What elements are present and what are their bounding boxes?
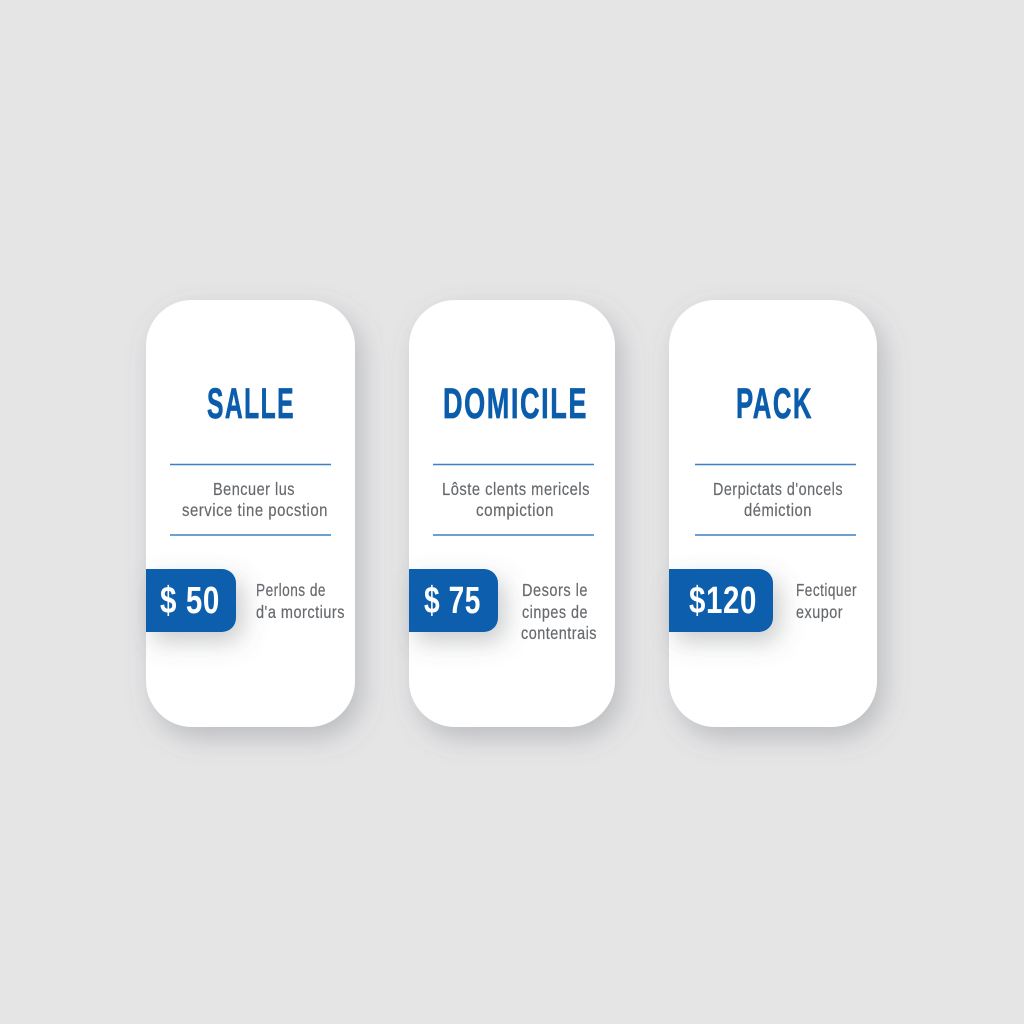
heading: SALLE: SALLE bbox=[207, 380, 295, 428]
description: Bencuer lus bbox=[213, 479, 295, 499]
heading: PACK: PACK bbox=[736, 380, 813, 428]
side note: Desors le bbox=[522, 580, 588, 600]
side note: exupor bbox=[796, 602, 843, 622]
description bbox=[713, 479, 843, 520]
description: Lôste clents mericels bbox=[442, 479, 590, 499]
description: démiction bbox=[744, 500, 812, 520]
heading: DOMICILE: DOMICILE bbox=[443, 380, 588, 428]
description: service tine pocstion bbox=[182, 500, 328, 520]
side note bbox=[521, 580, 597, 643]
side note: Fectiquer bbox=[796, 580, 857, 600]
price badge: $120: $120 bbox=[689, 580, 757, 622]
side note bbox=[256, 580, 345, 622]
side note: contentrais bbox=[521, 623, 597, 643]
side note: cinpes de bbox=[522, 602, 588, 622]
price badge: $120 bbox=[669, 569, 773, 632]
panel: DOMICILE bbox=[409, 300, 615, 727]
price badge: $ 50: $ 50 bbox=[160, 580, 220, 622]
panel: SALLE bbox=[146, 300, 355, 727]
description: compiction bbox=[476, 500, 554, 520]
card background bbox=[146, 300, 355, 727]
side note bbox=[796, 580, 857, 622]
price badge: $ 75 bbox=[409, 569, 498, 632]
description bbox=[182, 479, 328, 520]
price badge: $ 75: $ 75 bbox=[424, 580, 481, 622]
side note: Perlons de bbox=[256, 580, 326, 600]
card background bbox=[409, 300, 615, 727]
price badge: $ 50 bbox=[146, 569, 236, 632]
card background bbox=[669, 300, 877, 727]
description: Derpictats d'oncels bbox=[713, 479, 843, 499]
side note: d'a morctiurs bbox=[256, 602, 345, 622]
description bbox=[442, 479, 590, 520]
panel: PACK bbox=[669, 300, 877, 727]
